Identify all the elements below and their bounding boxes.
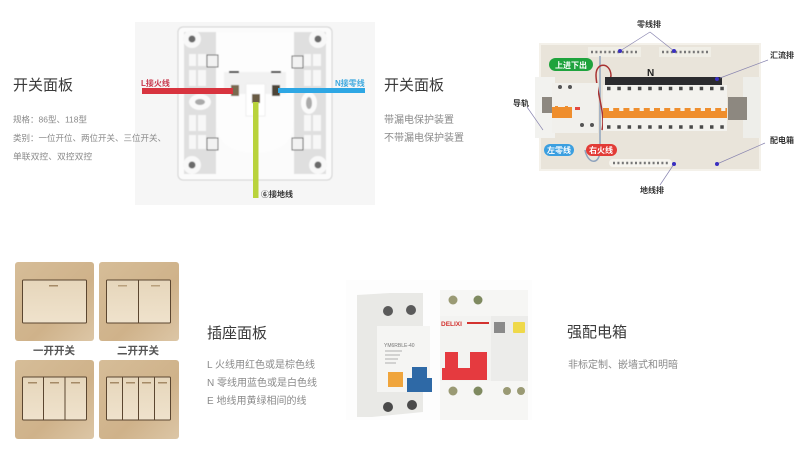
text block: specifications and types: 单联双控、双控双控 [13,150,92,162]
callout lines [527,32,768,185]
heading: switch panel: 开关面板 [13,76,73,94]
three-gang switch [15,360,94,439]
one-gang switch [15,262,94,341]
main breaker [552,83,598,133]
text block: wire colours: L 火线用红色或是棕色线 [207,358,315,371]
wire: live red [142,88,233,94]
heading: switch panel right: 开关面板 [384,76,444,94]
tag: top in bottom out [549,58,593,71]
label: rail: 导轨 [513,98,529,108]
four-gang switch [99,360,179,439]
box body [540,44,760,170]
red-handle breaker [440,290,528,420]
wire: neutral blue [278,88,365,93]
blue-handle breaker [357,293,432,417]
text block: leakage protection [384,113,464,144]
photo background [346,280,532,420]
blue-handle breaker: YM6RBLE-40 [384,343,415,349]
text block: wire colours: N 零线用蓝色或是白色线 [207,376,317,389]
branch breakers [603,85,727,131]
panel: socket panel text [207,324,317,407]
panel: switch photos [15,262,179,439]
label: neutral bar: 零线排 [637,19,661,29]
label: earth bar: 地线排 [640,185,664,195]
socket plate [178,27,332,180]
label: earth wire: ⑥接地线 [261,189,293,199]
text block: leakage protection: 带漏电保护装置 [384,113,454,126]
earth bar [609,159,672,167]
label: neutral wire: N接零线 [335,78,365,88]
label: live wire: L接火线 [141,78,170,88]
text block: wire colours [207,358,317,407]
label: busbar: 汇流排 [770,50,794,60]
text block: box types: 非标定制、嵌墙式和明暗 [568,358,678,371]
panel: distribution box diagram [513,19,794,195]
photo background [135,22,375,205]
panel: switch panel text left [13,76,166,162]
panel: socket back photo with wires [135,22,375,205]
text block: leakage protection: 不带漏电保护装置 [384,131,464,144]
text block: specifications and types [13,114,166,162]
panel: breaker photos [346,280,532,420]
busbar: N [647,68,654,79]
panel: switch panel text right [384,76,464,144]
label: one-gang: 一开开关 [33,344,75,357]
heading: strong-current box: 强配电箱 [567,324,627,341]
neutral bars [588,47,711,57]
label: distribution box: 配电箱 [770,135,794,145]
mounting brackets [535,77,760,138]
wire: earth yellow-green [253,102,258,198]
tag: left neutral [544,144,574,156]
tag: right live: 右火线 [589,145,613,155]
tag: left neutral: 左零线 [547,145,571,155]
tag: right live [586,144,617,156]
tag: top in bottom out: 上进下出 [555,60,587,70]
red and blue wires [585,56,611,161]
label: two-gang: 二开开关 [117,344,159,357]
text block: specifications and types: 类别：一位开位、两位开关、三位开关、 [13,133,166,143]
heading: socket panel: 插座面板 [207,324,267,342]
busbar [605,68,722,85]
red-handle breaker: DELIXI [441,321,462,328]
text block: specifications and types: 规格：86型、118型 [13,114,88,124]
text block: wire colours: E 地线用黄绿相间的线 [207,394,306,407]
two-gang switch [99,262,179,341]
panel: strong-current box text [567,324,678,371]
